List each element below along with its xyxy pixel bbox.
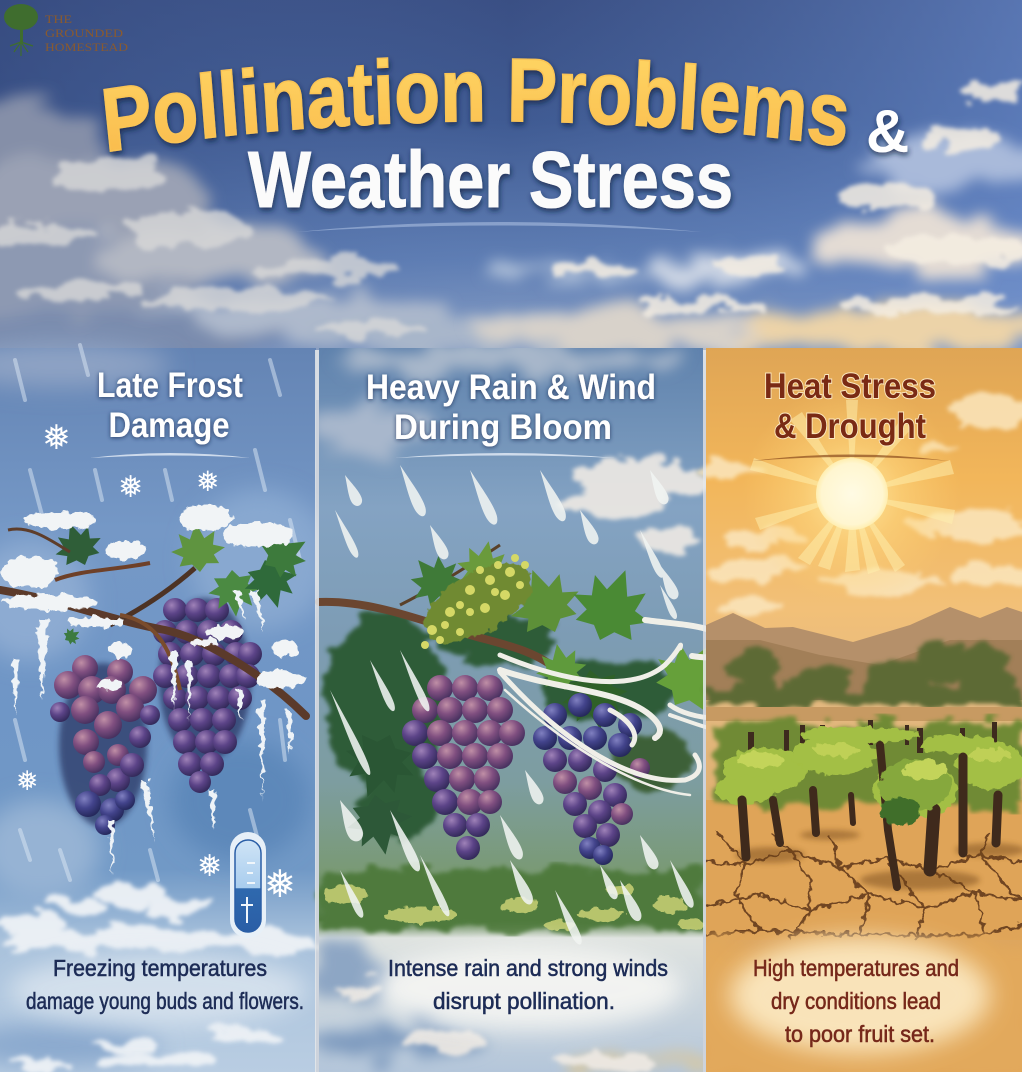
rain drops [326, 463, 696, 946]
grape cluster centre [402, 675, 525, 860]
caption: heat: High temperatures and [753, 955, 959, 981]
caption: heat [753, 955, 959, 1047]
frost haze background [0, 343, 330, 1067]
branch and leaves [319, 537, 742, 860]
heading: late frost damage [97, 366, 243, 445]
icon: sun [742, 384, 962, 604]
foliage background [323, 610, 695, 840]
snow ground [0, 886, 320, 1071]
clouds background [319, 348, 703, 1072]
fair clouds right [470, 132, 1022, 354]
bright cloud tops left [0, 158, 425, 338]
heading: late frost damage: Late Frost [97, 366, 243, 405]
title underline [296, 222, 702, 232]
caption: rain: Intense rain and strong winds [388, 955, 668, 981]
vine trunks [742, 745, 998, 887]
title ampersand: & [866, 98, 909, 165]
heading: heavy rain and wind [366, 368, 656, 447]
ice rain streaks [15, 345, 300, 880]
caption: rain: disrupt pollination. [433, 988, 615, 1014]
icon: snowflakes by thermometer: ❅ [264, 862, 296, 906]
storm clouds left [0, 100, 640, 365]
text backdrop [730, 937, 990, 1053]
dusty lower area [690, 945, 1022, 1072]
icon: thermometer [230, 832, 266, 938]
heading underline [395, 453, 615, 458]
icon: snowflakes by thermometer: ❅ [197, 849, 222, 884]
snowflakes [16, 418, 219, 797]
heading underline [90, 453, 250, 458]
logo text: HOMESTEAD [45, 40, 128, 54]
wind swirls [500, 620, 753, 795]
vineyard field [706, 707, 1022, 818]
panel: heavy rain and wind during bloom [312, 348, 706, 1072]
icon: tree [4, 4, 38, 56]
logo text [45, 12, 128, 54]
vine shadows [735, 830, 1022, 890]
icicles [12, 590, 292, 875]
logo text: GROUNDED [45, 26, 123, 40]
heading: heat stress and drought: Heat Stress [764, 367, 936, 406]
title line one: Pollination Problems [102, 57, 850, 158]
heading: heavy rain and wind: During Bloom [394, 408, 612, 447]
vine leaves foreground [736, 743, 1010, 826]
caption: heat: to poor fruit set. [785, 1021, 935, 1047]
heading: heat stress and drought: & Drought [774, 407, 926, 446]
snowflakes: ❅ [16, 766, 39, 797]
tree line [706, 640, 1022, 707]
panel: heat stress and drought [690, 348, 1022, 1072]
snowflakes: ❅ [118, 470, 143, 505]
cracked earth [706, 830, 1022, 940]
caption: frost: Freezing temperatures [53, 955, 267, 981]
heading: late frost damage: Damage [108, 406, 230, 445]
snowflakes: ❅ [196, 465, 219, 498]
caption: rain [388, 955, 668, 1014]
grape shadow [59, 598, 251, 827]
logo [4, 4, 128, 56]
leaves with frost [47, 515, 318, 648]
icon: snowflakes by thermometer [197, 849, 296, 906]
bloom meadow spots [323, 885, 704, 930]
text backdrop [8, 954, 308, 1026]
logo text: THE [45, 12, 72, 26]
grape cluster left [50, 655, 160, 835]
mountains [706, 607, 1022, 700]
caption: frost: damage young buds and flowers. [26, 988, 304, 1014]
grape cluster right [153, 598, 262, 793]
warm clouds [703, 392, 1022, 611]
title [102, 57, 912, 232]
flower bloom cluster [411, 547, 545, 659]
ground foliage [319, 868, 703, 930]
sky background [0, 0, 1022, 400]
caption: heat: dry conditions lead [771, 988, 941, 1014]
snowflakes: ❅ [42, 418, 70, 458]
heading: heavy rain and wind: Heavy Rain & Wind [366, 368, 656, 407]
grape cluster blown [533, 693, 650, 865]
caption: frost [26, 955, 304, 1014]
heading: heat stress and drought [764, 367, 936, 446]
title line two: Weather Stress [248, 135, 733, 224]
panel dividers [315, 350, 706, 1072]
branch with snow [0, 505, 306, 716]
text backdrop [373, 946, 683, 1030]
ground [706, 800, 1022, 940]
panel: late frost damage [0, 343, 330, 1072]
heading underline [752, 454, 950, 461]
